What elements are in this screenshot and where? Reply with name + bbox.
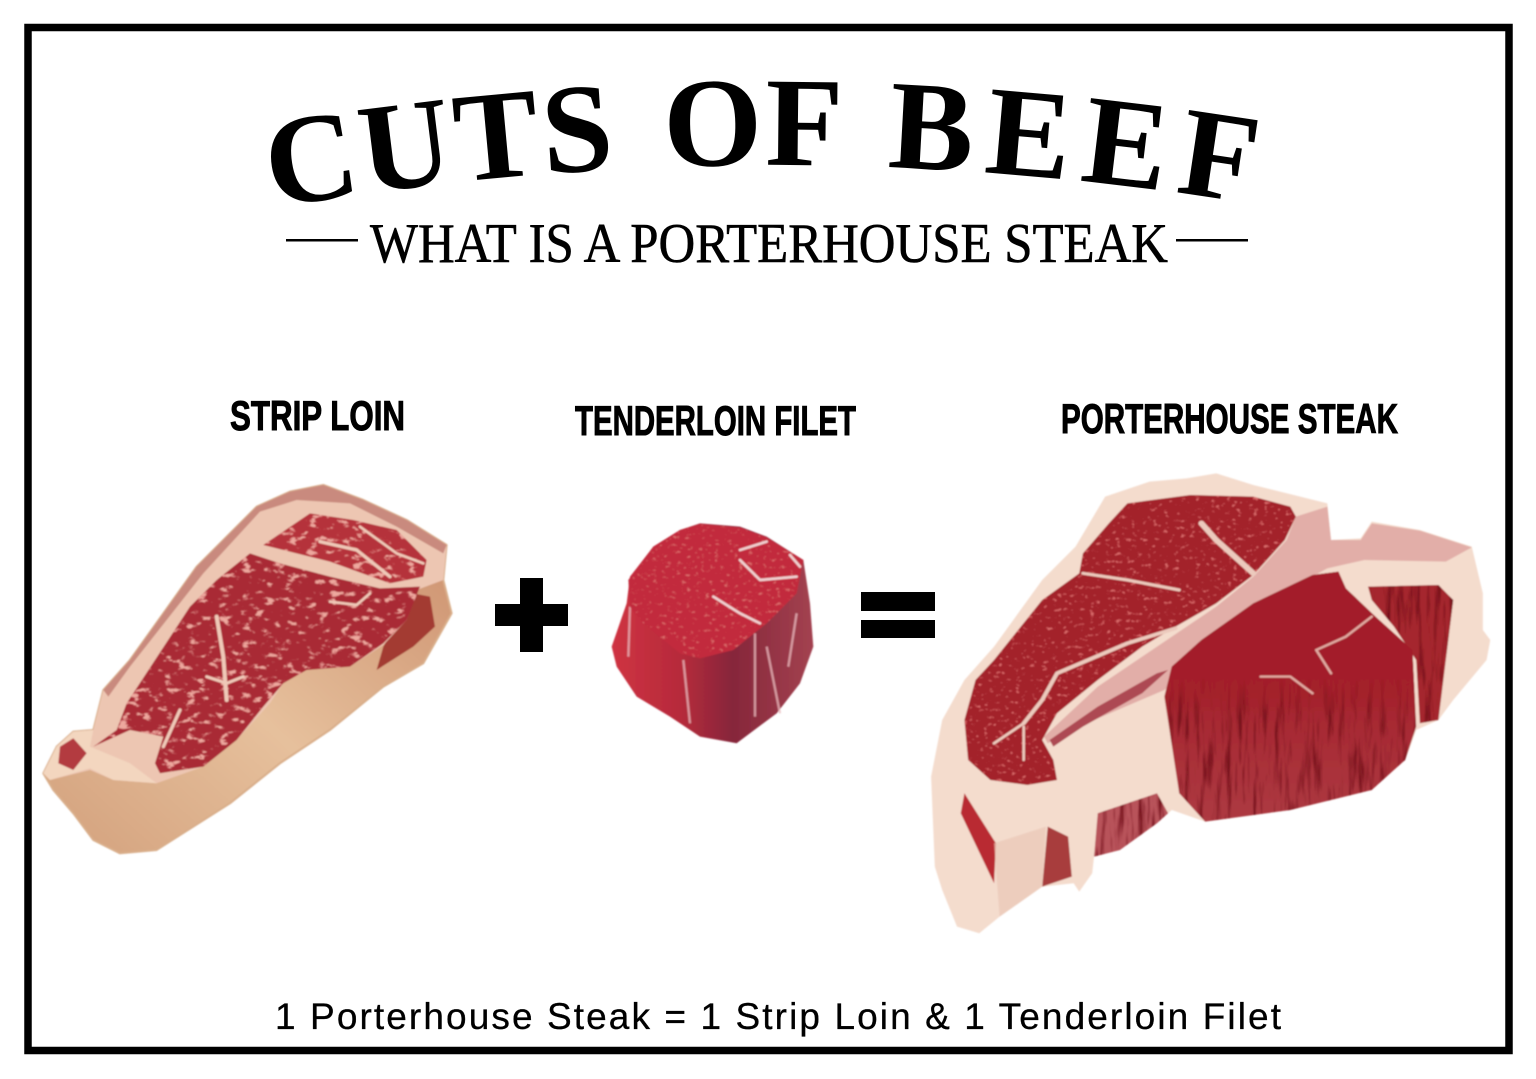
caption: 1 Porterhouse Steak = 1 Strip Loin & 1 Tenderloin Filet (275, 996, 1282, 1037)
subtitle with rules: WHAT IS A PORTERHOUSE STEAK (370, 213, 1168, 275)
label: tenderloin filet: TENDERLOIN FILET (575, 397, 856, 444)
image: tenderloin filet (612, 523, 813, 743)
icon: equals sign (861, 592, 935, 638)
label: strip loin: STRIP LOIN (230, 392, 405, 439)
title: CUTS OF BEEF (271, 81, 1258, 202)
image: porterhouse steak (931, 473, 1490, 933)
label: porterhouse steak: PORTERHOUSE STEAK (1061, 395, 1398, 442)
image: strip loin steak (43, 485, 452, 853)
icon: plus sign (495, 578, 568, 652)
